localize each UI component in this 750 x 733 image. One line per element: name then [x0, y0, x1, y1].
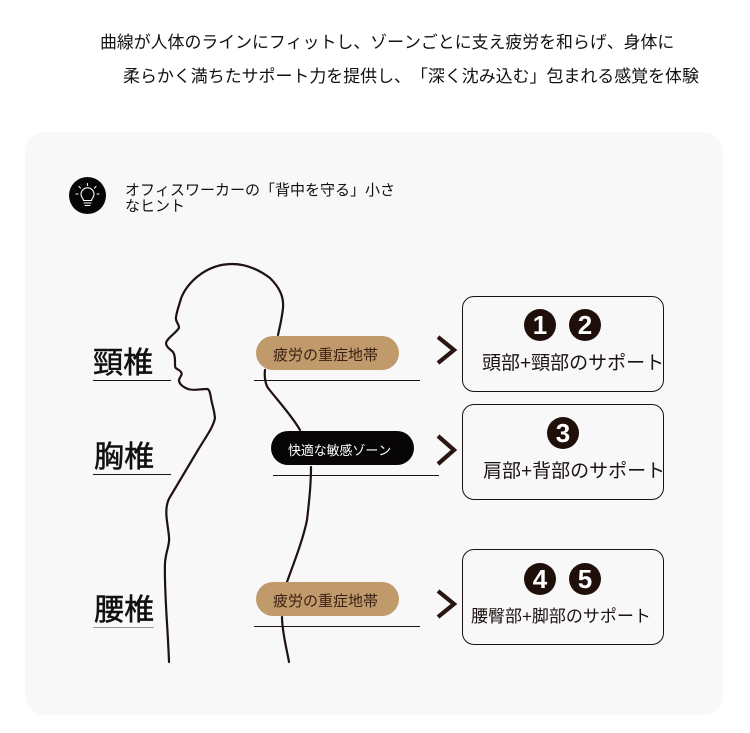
number 1: 1	[533, 310, 547, 340]
panel heading	[125, 182, 395, 215]
intro line 2: 柔らかく満ちたサポート力を提供し、「深く沈み込む」包まれる感覚を体験	[123, 67, 699, 86]
spine label: cervical: 頸椎	[93, 347, 153, 380]
spine label: thoracic: 胸椎	[94, 441, 154, 474]
number 3	[547, 417, 579, 449]
box: head and neck support	[462, 296, 664, 392]
number 4: 4	[533, 564, 547, 594]
panel: tips	[25, 132, 723, 715]
number 3: 3	[556, 418, 570, 448]
box: shoulder and back support	[462, 404, 664, 500]
spine label: lumbar: 腰椎	[94, 594, 154, 627]
box label: 肩部+背部のサポート	[483, 461, 665, 482]
number 5: 5	[578, 564, 592, 594]
icon: light bulb	[69, 177, 106, 214]
pill: fatigue zone 2	[256, 582, 399, 616]
number 2: 2	[578, 310, 592, 340]
panel heading: オフィスワーカーの「背中を守る」小さ	[125, 182, 395, 199]
panel heading: なヒント	[125, 198, 185, 215]
box: waist and leg support	[462, 549, 664, 645]
pill: fatigue zone 1: 疲労の重症地帯	[273, 347, 378, 364]
number 2	[569, 309, 601, 341]
intro line 1: 曲線が人体のラインにフィットし、ゾーンごとに支え疲労を和らげ、身体に	[100, 33, 674, 52]
number 4	[524, 563, 556, 595]
pill: fatigue zone 2: 疲労の重症地帯	[273, 593, 378, 610]
arrows	[436, 335, 458, 619]
box label: 腰臀部+脚部のサポート	[471, 607, 651, 626]
number 5	[569, 563, 601, 595]
box label: 頭部+頸部のサポート	[482, 353, 664, 374]
pill: sensitive zone	[271, 431, 414, 465]
number 1	[524, 309, 556, 341]
pill: sensitive zone: 快適な敏感ゾーン	[288, 443, 391, 458]
intro text	[100, 33, 699, 86]
pill: fatigue zone 1	[256, 336, 399, 370]
